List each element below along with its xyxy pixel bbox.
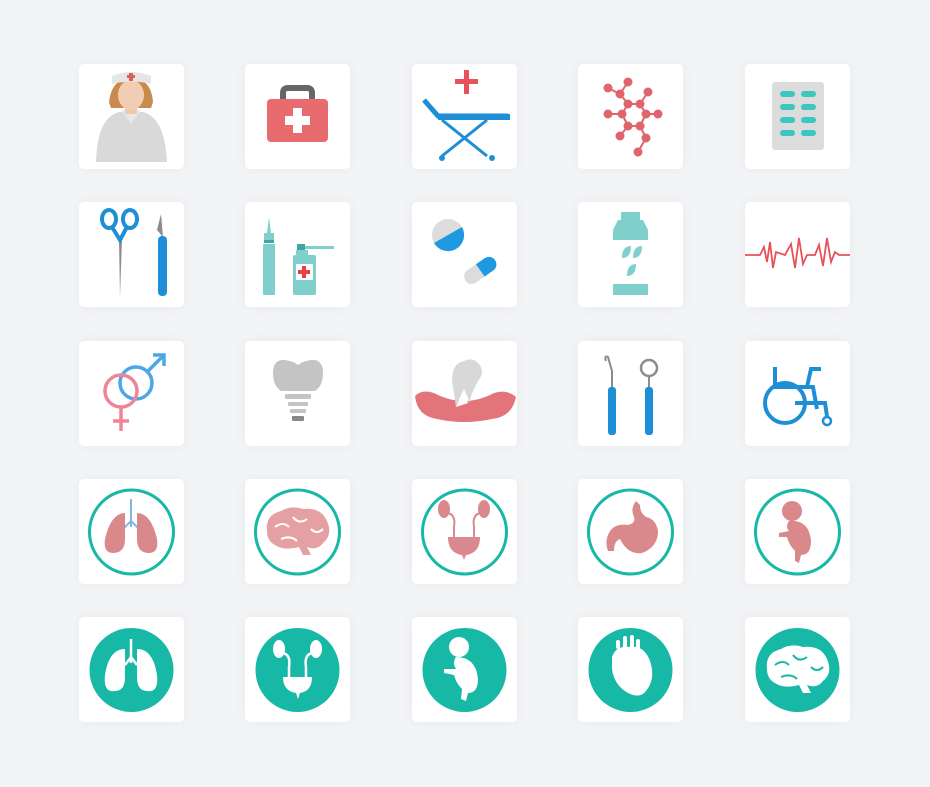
icon: heart on teal circle	[588, 628, 672, 712]
card: stomach outline	[578, 479, 683, 584]
icon: medicine bottles	[263, 217, 334, 295]
card: urinary outline	[412, 479, 517, 584]
card: molecule	[578, 64, 683, 169]
icon: fetus in ring	[756, 490, 840, 574]
icon: wheelchair	[765, 367, 831, 425]
icon: stretcher	[424, 70, 510, 161]
card: tooth extraction	[412, 341, 517, 446]
card: pill blister	[745, 64, 850, 169]
icon: urinary in ring	[422, 490, 506, 574]
icon: urinary on teal circle	[256, 628, 340, 712]
icon: pill blister	[772, 82, 824, 150]
icon: molecule	[604, 78, 662, 156]
card: first aid kit	[245, 64, 350, 169]
card: heartbeat	[745, 202, 850, 307]
card: fetus outline	[745, 479, 850, 584]
card: heart filled	[578, 617, 683, 722]
card: urinary filled	[245, 617, 350, 722]
card: lungs outline	[79, 479, 184, 584]
icon: brain on teal circle	[756, 628, 840, 712]
icon: lungs on teal circle	[90, 628, 174, 712]
card: medicine bottles	[245, 202, 350, 307]
icon: lungs in ring	[90, 490, 174, 574]
card: dental tools	[578, 341, 683, 446]
icon: dental tools	[605, 356, 657, 435]
icon: fetus on teal circle	[422, 628, 506, 712]
card: brain filled	[745, 617, 850, 722]
icon: gender symbols	[105, 355, 164, 431]
icon: dental implant	[273, 360, 323, 421]
icon: heartbeat	[745, 238, 850, 268]
icon: capsules	[432, 219, 499, 287]
card: lungs filled	[79, 617, 184, 722]
card: scissors and scalpel	[79, 202, 184, 307]
card: gender symbols	[79, 341, 184, 446]
icon: stomach in ring	[588, 490, 672, 574]
card: fetus filled	[412, 617, 517, 722]
card: herbal bottle	[578, 202, 683, 307]
icon: first aid kit	[267, 88, 328, 142]
card: wheelchair	[745, 341, 850, 446]
card: brain outline	[245, 479, 350, 584]
card: capsules	[412, 202, 517, 307]
card: nurse	[79, 64, 184, 169]
card: dental implant	[245, 341, 350, 446]
icon: nurse	[96, 72, 167, 162]
icon: tooth extraction	[415, 359, 516, 422]
card: stretcher	[412, 64, 517, 169]
icon: scissors and scalpel	[102, 210, 167, 297]
icon: herbal bottle	[613, 212, 648, 295]
icon: brain in ring	[256, 490, 340, 574]
